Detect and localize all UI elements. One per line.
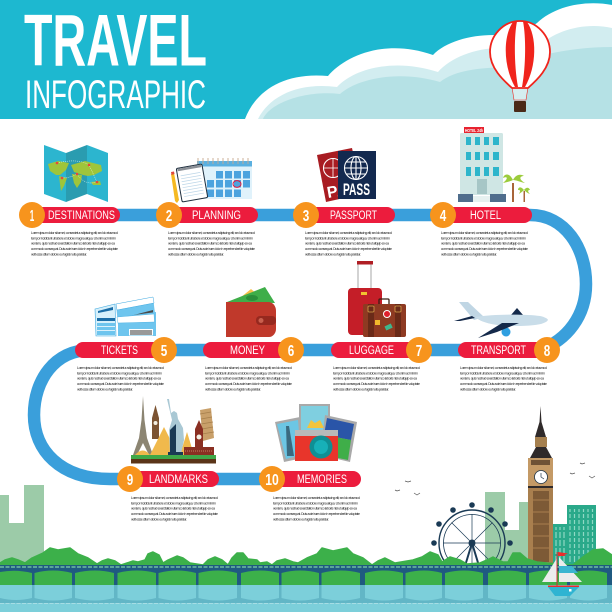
text block: Lorem ipsum dolor sit amet, consectetur adipiscing elit, sed do eiusmod (31, 231, 118, 235)
text block: commodo consequat. Duis aute irure dolor in reprehenderit in voluptate (31, 247, 118, 251)
text block: Lorem ipsum dolor sit amet, consectetur adipiscing elit, sed do eiusmod (131, 496, 218, 500)
text block (305, 231, 392, 256)
text block: velit esse cillum dolore eu fugiat nulla pariatur. (168, 252, 224, 256)
icon: passports: PA (326, 181, 350, 202)
icon: world map (44, 145, 108, 202)
text block: tempor incididunt ut labore et dolore magna aliqua. Ut enim ad minim (333, 371, 418, 375)
number badge: 2 (166, 208, 172, 225)
bridge (0, 565, 612, 585)
text block: tempor incididunt ut labore et dolore magna aliqua. Ut enim ad minim (31, 236, 116, 240)
text block: veniam, quis nostrud exercitation ullamco laboris nisi ut aliquip ex ea (131, 507, 215, 511)
label: MEMORIES (297, 474, 347, 486)
text block (131, 496, 218, 521)
trees (0, 548, 612, 568)
text block: veniam, quis nostrud exercitation ullamco laboris nisi ut aliquip ex ea (460, 377, 544, 381)
icon: airplane (454, 302, 548, 338)
text block: commodo consequat. Duis aute irure dolor in reprehenderit in voluptate (131, 512, 218, 516)
step 7: luggage (331, 261, 432, 391)
label bar (272, 471, 361, 487)
text block: commodo consequat. Duis aute irure dolor in reprehenderit in voluptate (77, 382, 164, 386)
text block: velit esse cillum dolore eu fugiat nulla pariatur. (77, 387, 133, 391)
text block: commodo consequat. Duis aute irure dolor in reprehenderit in voluptate (460, 382, 547, 386)
icon: world landmarks (131, 396, 216, 464)
text block: velit esse cillum dolore eu fugiat nulla pariatur. (441, 252, 497, 256)
number badge: 5 (161, 343, 167, 360)
text block: Lorem ipsum dolor sit amet, consectetur adipiscing elit, sed do eiusmod (273, 496, 360, 500)
label: HOTEL (470, 210, 501, 222)
number badge: 7 (416, 343, 422, 360)
number badge: 1 (30, 208, 34, 225)
text block: velit esse cillum dolore eu fugiat nulla pariatur. (31, 252, 87, 256)
text block (31, 231, 118, 256)
text block: veniam, quis nostrud exercitation ullamco laboris nisi ut aliquip ex ea (168, 242, 252, 246)
icon: hot air balloon (490, 21, 550, 112)
text block: Lorem ipsum dolor sit amet, consectetur adipiscing elit, sed do eiusmod (205, 366, 292, 370)
number badge: 9 (127, 472, 133, 489)
label bar (443, 207, 532, 223)
icon: suitcases (348, 261, 406, 337)
text block: tempor incididunt ut labore et dolore magna aliqua. Ut enim ad minim (460, 371, 545, 375)
text block: velit esse cillum dolore eu fugiat nulla pariatur. (131, 517, 187, 521)
river (0, 585, 612, 612)
step 8: transport (454, 302, 560, 391)
birds (395, 463, 595, 495)
text block: commodo consequat. Duis aute irure dolor in reprehenderit in voluptate (305, 247, 392, 251)
icon: plane tickets (95, 297, 156, 336)
text block: velit esse cillum dolore eu fugiat nulla pariatur. (273, 517, 329, 521)
label bar (458, 342, 547, 358)
icon: passports (317, 148, 376, 202)
text block (77, 366, 164, 391)
step 9: landmarks (117, 396, 219, 521)
label: DESTINATIONS (48, 210, 115, 222)
text block: veniam, quis nostrud exercitation ullamco laboris nisi ut aliquip ex ea (205, 377, 289, 381)
text block (441, 231, 528, 256)
step 3: passport (293, 148, 395, 256)
text block: velit esse cillum dolore eu fugiat nulla pariatur. (205, 387, 261, 391)
text block: commodo consequat. Duis aute irure dolor in reprehenderit in voluptate (205, 382, 292, 386)
step 6: money (203, 287, 304, 391)
label: PLANNING (192, 210, 241, 222)
icon: sailboat (542, 552, 582, 596)
text block: commodo consequat. Duis aute irure dolor in reprehenderit in voluptate (333, 382, 420, 386)
label: TRANSPORT (471, 345, 526, 357)
text block (273, 496, 360, 521)
step 5: tickets (75, 297, 177, 391)
text block (205, 366, 292, 391)
text block: commodo consequat. Duis aute irure dolor in reprehenderit in voluptate (168, 247, 255, 251)
text block: tempor incididunt ut labore et dolore magna aliqua. Ut enim ad minim (441, 236, 526, 240)
text block: veniam, quis nostrud exercitation ullamco laboris nisi ut aliquip ex ea (333, 377, 417, 381)
label bar (169, 207, 258, 223)
text block: Lorem ipsum dolor sit amet, consectetur adipiscing elit, sed do eiusmod (460, 366, 547, 370)
title: INFOGRAPHIC (25, 73, 206, 117)
step 1: destinations (19, 145, 120, 256)
text block: tempor incididunt ut labore et dolore magna aliqua. Ut enim ad minim (273, 501, 358, 505)
label: TICKETS (101, 345, 138, 357)
label: MONEY (230, 345, 265, 357)
text block: tempor incididunt ut labore et dolore magna aliqua. Ut enim ad minim (77, 371, 162, 375)
text block: velit esse cillum dolore eu fugiat nulla pariatur. (333, 387, 389, 391)
text block: veniam, quis nostrud exercitation ullamco laboris nisi ut aliquip ex ea (305, 242, 389, 246)
number badge: 4 (440, 208, 446, 225)
text block: velit esse cillum dolore eu fugiat nulla pariatur. (305, 252, 361, 256)
text block: Lorem ipsum dolor sit amet, consectetur adipiscing elit, sed do eiusmod (441, 231, 528, 235)
label bar (130, 471, 219, 487)
icon: ferris wheel (431, 502, 513, 576)
label bar (203, 342, 291, 358)
text block: commodo consequat. Duis aute irure dolor in reprehenderit in voluptate (273, 512, 360, 516)
header banner (0, 0, 612, 119)
text block: veniam, quis nostrud exercitation ullamco laboris nisi ut aliquip ex ea (273, 507, 357, 511)
title (24, 0, 207, 117)
timeline road (34, 215, 586, 479)
icon: wallet with cash (226, 287, 276, 337)
text block: Lorem ipsum dolor sit amet, consectetur adipiscing elit, sed do eiusmod (305, 231, 392, 235)
text block: commodo consequat. Duis aute irure dolor in reprehenderit in voluptate (441, 247, 528, 251)
text block: tempor incididunt ut labore et dolore magna aliqua. Ut enim ad minim (131, 501, 216, 505)
label bar (75, 342, 164, 358)
icon: teal buildings (553, 505, 596, 565)
text block: Lorem ipsum dolor sit amet, consectetur adipiscing elit, sed do eiusmod (168, 231, 255, 235)
label bar (306, 207, 395, 223)
step 4: hotel (430, 127, 532, 256)
step 2: planning (156, 158, 258, 256)
text block: Lorem ipsum dolor sit amet, consectetur adipiscing elit, sed do eiusmod (77, 366, 164, 370)
step 10: memories (259, 404, 361, 521)
icon: photos and camera (275, 404, 357, 462)
text block (168, 231, 255, 256)
icon: passports: PASS (343, 181, 370, 199)
label: PASSPORT (330, 210, 377, 222)
text block: Lorem ipsum dolor sit amet, consectetur adipiscing elit, sed do eiusmod (333, 366, 420, 370)
number badge: 3 (303, 208, 309, 225)
title: TRAVEL (24, 0, 207, 82)
number badge: 6 (288, 343, 294, 360)
icon: big ben clock tower (528, 406, 553, 564)
text block: tempor incididunt ut labore et dolore magna aliqua. Ut enim ad minim (205, 371, 290, 375)
number badge: 10 (265, 472, 279, 489)
label: LANDMARKS (149, 474, 208, 486)
text block: tempor incididunt ut labore et dolore magna aliqua. Ut enim ad minim (305, 236, 390, 240)
background skyline (0, 485, 528, 565)
text block: tempor incididunt ut labore et dolore magna aliqua. Ut enim ad minim (168, 236, 253, 240)
text block: veniam, quis nostrud exercitation ullamco laboris nisi ut aliquip ex ea (77, 377, 161, 381)
text block: veniam, quis nostrud exercitation ullamco laboris nisi ut aliquip ex ea (31, 242, 115, 246)
icon: calendar and notebook (171, 158, 252, 203)
text block: veniam, quis nostrud exercitation ullamco laboris nisi ut aliquip ex ea (441, 242, 525, 246)
text block (460, 366, 547, 391)
label: LUGGAGE (349, 345, 394, 357)
text block: velit esse cillum dolore eu fugiat nulla pariatur. (460, 387, 516, 391)
icon: hotel building with palms: HOTEL 24h (465, 128, 483, 133)
label bar (32, 207, 120, 223)
text block (333, 366, 420, 391)
label bar (331, 342, 419, 358)
number badge: 8 (544, 343, 550, 360)
